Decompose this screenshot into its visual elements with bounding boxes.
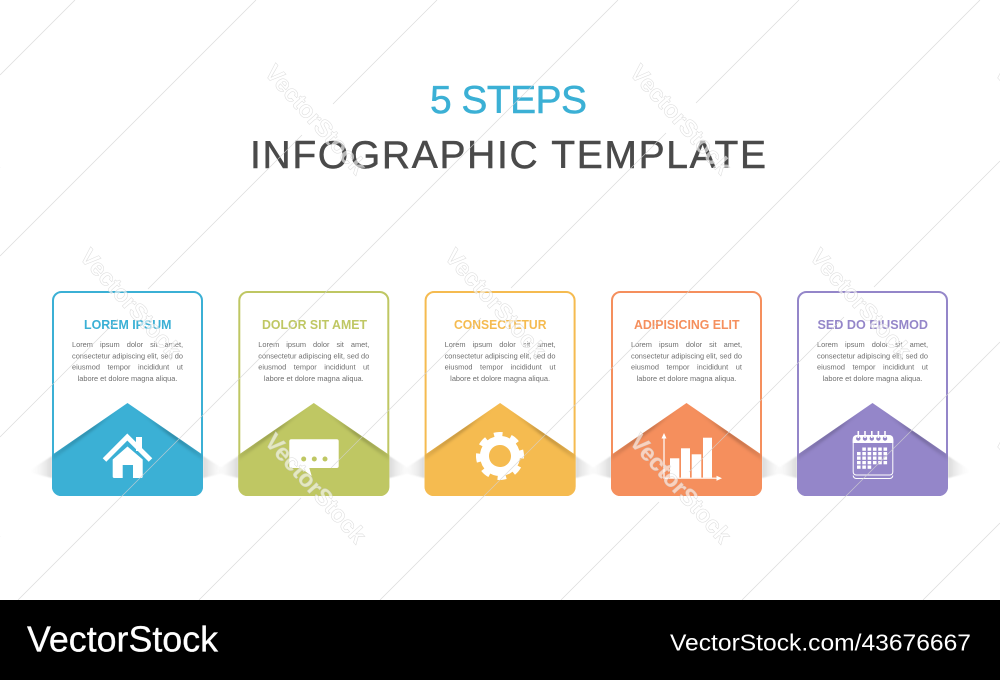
watermark text: VectorStock xyxy=(260,428,372,549)
footer bar xyxy=(0,600,1000,680)
inner shadows xyxy=(238,416,389,458)
panel: step 4 adipisicing elit xyxy=(598,291,776,496)
body text: eiusmod tempor incididunt ut xyxy=(258,363,369,372)
body text xyxy=(817,340,928,383)
body text xyxy=(72,340,183,383)
body text: consectetur adipiscing elit, sed do xyxy=(445,351,556,360)
inner shadows xyxy=(611,416,762,458)
body text: consectetur adipiscing elit, sed do xyxy=(258,351,369,360)
watermark text: VectorStock xyxy=(75,243,187,364)
fold shadows xyxy=(27,456,228,478)
icon: house xyxy=(104,437,150,478)
body text: labore et dolore magna aliqua. xyxy=(637,374,736,383)
body text: Lorem ipsum dolor sit amet, xyxy=(258,340,369,349)
coloured base xyxy=(611,403,762,496)
body text xyxy=(631,340,742,383)
icon: bar chart xyxy=(662,433,722,481)
watermark text: VectorStock xyxy=(805,243,917,364)
card outline xyxy=(426,292,575,495)
panel: step 5 sed do eiusmod xyxy=(784,291,962,496)
watermark text xyxy=(0,59,1000,549)
body text: eiusmod tempor incididunt ut xyxy=(72,363,183,372)
inner shadows xyxy=(798,416,948,458)
body text: Lorem ipsum dolor sit amet, xyxy=(817,340,928,349)
fold shadows xyxy=(213,456,414,478)
inner shadows xyxy=(52,416,202,458)
title: infographic template: INFOGRAPHIC TEMPLATE xyxy=(250,134,766,177)
icon: calendar xyxy=(853,431,893,478)
body text: Lorem ipsum dolor sit amet, xyxy=(445,340,556,349)
body text: Lorem ipsum dolor sit amet, xyxy=(72,340,183,349)
panel: step 1 lorem ipsum xyxy=(38,291,216,496)
icon: gear xyxy=(477,433,523,479)
card outline xyxy=(239,292,388,495)
footer url: VectorStock.com/43676667 xyxy=(670,630,971,656)
heading: SED DO EIUSMOD xyxy=(818,318,928,332)
body text: labore et dolore magna aliqua. xyxy=(264,374,364,383)
body text: consectetur adipiscing elit, sed do xyxy=(817,351,928,360)
panel: step 2 dolor sit amet xyxy=(225,291,403,496)
title: 5 steps: 5 STEPS xyxy=(430,79,587,122)
heading: LOREM IPSUM xyxy=(84,318,172,332)
coloured base xyxy=(797,403,948,496)
fold shadows xyxy=(400,456,601,478)
coloured base xyxy=(52,403,203,496)
coloured base xyxy=(238,403,389,496)
card outline xyxy=(612,292,761,495)
fold shadows xyxy=(586,456,787,478)
body text: labore et dolore magna aliqua. xyxy=(823,374,922,383)
watermark text: VectorStock xyxy=(260,59,372,180)
footer logo text: VectorStock xyxy=(27,619,219,660)
card outline xyxy=(798,292,947,495)
body text: labore et dolore magna aliqua. xyxy=(78,374,177,383)
watermark text: VectorStock xyxy=(625,59,737,180)
panel: step 3 consectetur xyxy=(411,291,589,496)
card outline xyxy=(53,292,202,495)
body text: Lorem ipsum dolor sit amet, xyxy=(631,340,742,349)
heading: ADIPISICING ELIT xyxy=(634,318,740,332)
body text: eiusmod tempor incididunt ut xyxy=(445,363,556,372)
heading: CONSECTETUR xyxy=(454,318,546,332)
body text xyxy=(445,340,556,383)
body text: eiusmod tempor incididunt ut xyxy=(817,363,928,372)
body text: labore et dolore magna aliqua. xyxy=(450,374,550,383)
watermark text: VectorStock xyxy=(440,243,552,364)
inner shadows xyxy=(425,416,576,458)
heading: DOLOR SIT AMET xyxy=(262,318,367,332)
fold shadows xyxy=(772,456,973,478)
body text xyxy=(258,340,369,383)
body text: consectetur adipiscing elit, sed do xyxy=(631,351,742,360)
body text: eiusmod tempor incididunt ut xyxy=(631,363,742,372)
coloured base xyxy=(425,403,576,496)
watermark text: VectorStock xyxy=(625,428,737,549)
icon: chat bubble xyxy=(289,439,339,476)
body text: consectetur adipiscing elit, sed do xyxy=(72,351,183,360)
